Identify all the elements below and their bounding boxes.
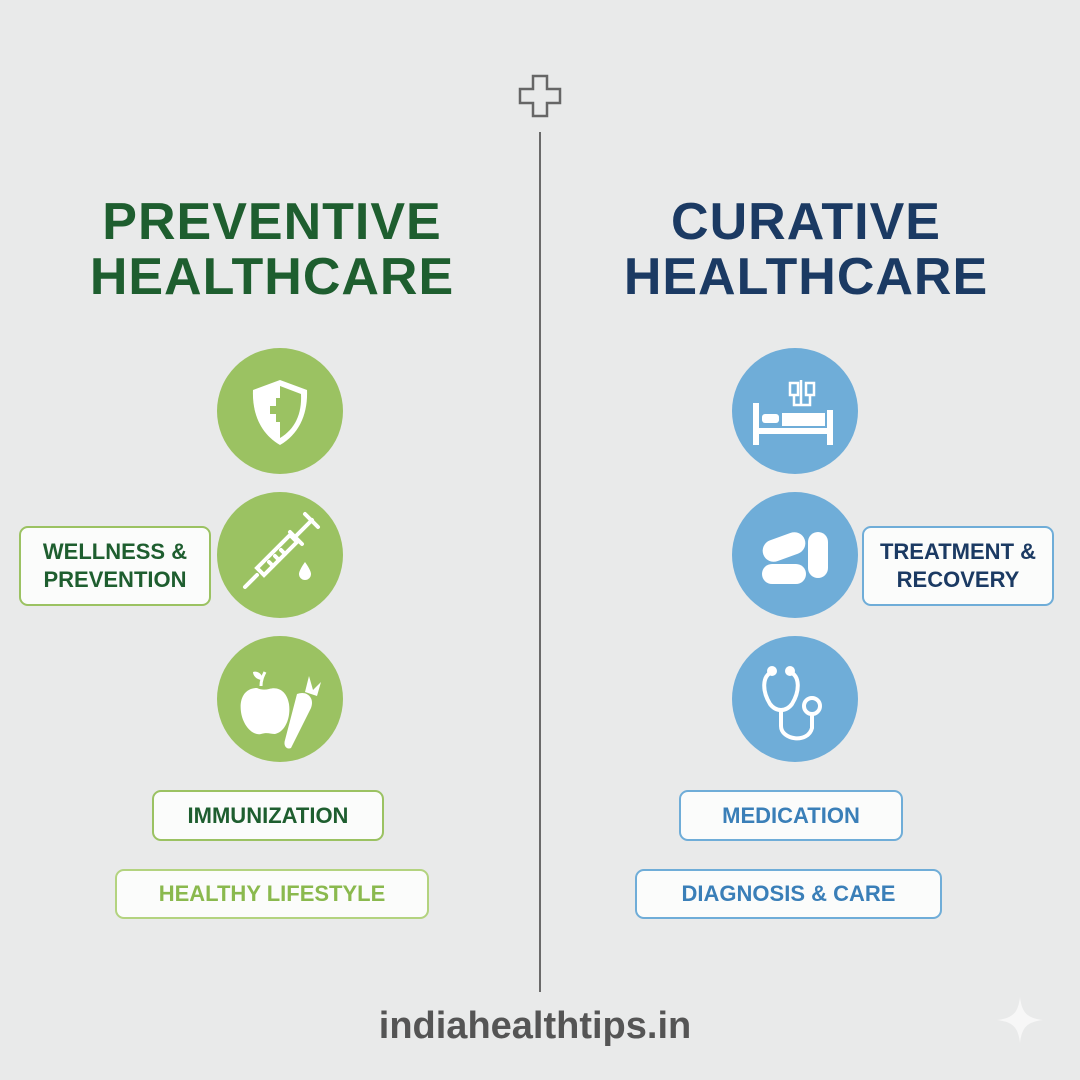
label: diagnosis & care: DIAGNOSIS & CARE bbox=[682, 881, 895, 906]
divider line bbox=[539, 132, 541, 992]
label: treatment & recovery bbox=[862, 526, 1054, 606]
label: wellness & prevention: WELLNESS & bbox=[43, 539, 187, 564]
label: medication: MEDICATION bbox=[722, 802, 860, 828]
label: immunization: IMMUNIZATION bbox=[188, 802, 348, 828]
icon: pills bbox=[732, 492, 858, 618]
footer: website: indiahealthtips.in bbox=[379, 1005, 691, 1047]
icon: sparkle bbox=[1000, 999, 1040, 1041]
icon: shield bbox=[217, 348, 343, 474]
icon: stethoscope bbox=[732, 636, 858, 762]
title: preventive: PREVENTIVE bbox=[102, 193, 442, 251]
title: preventive bbox=[90, 193, 454, 306]
label: treatment & recovery: TREATMENT & bbox=[880, 539, 1036, 564]
label: diagnosis & care bbox=[635, 869, 942, 919]
title: curative: CURATIVE bbox=[671, 193, 941, 251]
label: medication bbox=[679, 790, 903, 841]
icon: medical plus bbox=[518, 74, 562, 118]
label: immunization bbox=[152, 790, 384, 841]
label: healthy lifestyle: HEALTHY LIFESTYLE bbox=[159, 881, 385, 906]
title: curative: HEALTHCARE bbox=[624, 248, 988, 306]
icon: hospital bed bbox=[732, 348, 858, 474]
label: wellness & prevention: PREVENTION bbox=[43, 567, 186, 592]
title: preventive: HEALTHCARE bbox=[90, 248, 454, 306]
label: treatment & recovery: RECOVERY bbox=[897, 567, 1019, 592]
icon: apple and carrot bbox=[217, 636, 343, 762]
label: healthy lifestyle bbox=[115, 869, 429, 919]
title: curative bbox=[624, 193, 988, 306]
label: wellness & prevention bbox=[19, 526, 211, 606]
icon: syringe bbox=[217, 492, 343, 618]
